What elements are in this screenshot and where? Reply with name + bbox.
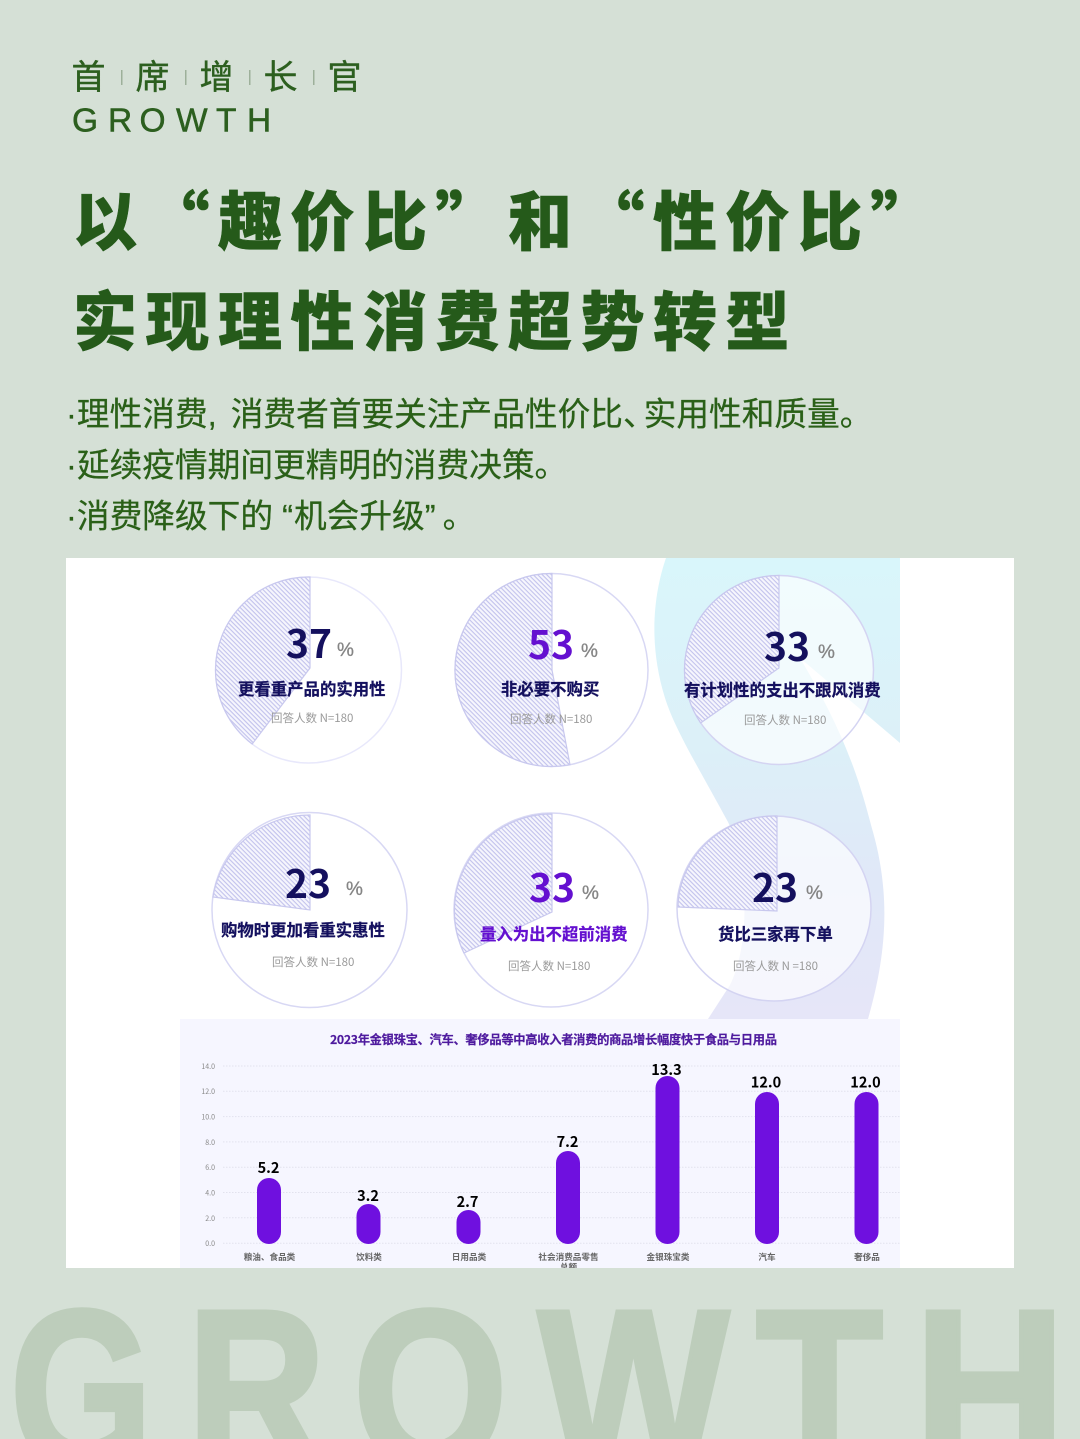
category labels: 社会消费品零售 [538, 1251, 599, 1263]
bar values: 12.0 [751, 1072, 781, 1092]
bars [257, 1076, 878, 1244]
pie: 33% planned spending: 33 [764, 617, 810, 673]
pie: 53%: 回答人数 N=180 [510, 711, 592, 727]
y axis labels: 4.0 [205, 1188, 215, 1198]
bar values: 13.3 [651, 1059, 682, 1080]
white content panel [66, 558, 1014, 1268]
bar values: 5.2 [258, 1157, 279, 1178]
bar chart panel [180, 1019, 900, 1273]
title: 实现理性消费超势转型 [73, 272, 798, 364]
category labels: 金银珠宝类 [647, 1251, 690, 1263]
bullet points [66, 396, 872, 534]
bar values: 12.0 [850, 1072, 881, 1092]
category labels: 日用品类 [452, 1251, 487, 1263]
pie: 53%: % [581, 641, 598, 662]
category labels [244, 1252, 880, 1268]
brand header [72, 50, 392, 140]
bullet points: ·理性消费, 消费者首要关注产品性价比、实用性和质量。 [66, 396, 872, 432]
pie: 23% compare prices: 货比三家再下单 [718, 921, 833, 945]
pie: 33% planned spending: % [818, 642, 835, 663]
category labels: 粮油、食品类 [244, 1251, 296, 1263]
pie: 33% planned spending: 回答人数 N=180 [744, 712, 826, 728]
pie: 37% [216, 577, 402, 763]
pie: 37%: % [337, 640, 354, 661]
bar values: 3.2 [357, 1185, 379, 1206]
pie: 37%: 回答人数 N=180 [271, 710, 353, 726]
category labels: 总额 [560, 1261, 577, 1273]
bar values: 2.7 [457, 1191, 478, 1212]
pie: 23% compare prices [677, 816, 871, 1001]
y axis labels: 14.0 [201, 1062, 215, 1072]
pie: 23% value for money: 回答人数 N=180 [272, 954, 354, 970]
category labels: 奢侈品 [854, 1251, 880, 1263]
y axis labels: 0.0 [205, 1239, 215, 1249]
pie: 33% live within means: % [582, 883, 599, 904]
bar values [258, 1059, 881, 1212]
title: 以“趣价比”和“性价比” [73, 172, 943, 264]
y axis labels: 8.0 [205, 1138, 215, 1148]
title [73, 172, 943, 364]
y axis labels: 2.0 [205, 1214, 215, 1224]
brand name: 首席增长官 [72, 50, 392, 99]
background watermark: GROWTH [16, 1307, 1054, 1439]
pie: 37%: 更看重产品的实用性 [238, 676, 386, 700]
decorative gradient band [654, 558, 900, 1019]
pie: 23% value for money: % [346, 879, 363, 900]
chart title: 2023年金银珠宝、汽车、奢侈品等中高收入者消费的商品增长幅度快于食品与日用品 [330, 1030, 777, 1048]
y axis labels: 10.0 [201, 1112, 215, 1122]
pie: 23% compare prices: 23 [752, 858, 798, 914]
brand separators [121, 70, 314, 85]
y axis labels: 6.0 [205, 1163, 215, 1173]
pie: 37%: 37 [286, 614, 332, 670]
pie: 33% planned spending [684, 576, 881, 764]
y axis labels [201, 1062, 215, 1249]
pie: 33% live within means: 33 [529, 858, 575, 914]
pie: 33% planned spending: 有计划性的支出不跟风消费 [684, 677, 881, 701]
pie: 33% live within means: 量入为出不超前消费 [480, 921, 628, 945]
pie: 53% [455, 573, 648, 766]
pie: 23% value for money: 23 [285, 854, 331, 910]
category labels: 饮料类 [356, 1251, 382, 1263]
brand subtitle: GROWTH [72, 102, 271, 140]
pie: 23% compare prices: % [806, 883, 823, 904]
bullet points: ·消费降级下的 “机会升级”。 [66, 498, 475, 534]
bullet points: ·延续疫情期间更精明的消费决策。 [66, 446, 567, 484]
bar values: 7.2 [557, 1131, 578, 1152]
pie: 53%: 非必要不购买 [501, 676, 599, 700]
pie: 23% compare prices: 回答人数 N =180 [733, 958, 818, 974]
pie: 23% value for money [212, 812, 407, 1008]
pie: 53%: 53 [528, 615, 574, 671]
y axis labels: 12.0 [201, 1087, 215, 1097]
pie: 23% value for money: 购物时更加看重实惠性 [221, 917, 385, 941]
pie: 33% live within means: 回答人数 N=180 [508, 958, 590, 974]
category labels: 汽车 [758, 1251, 776, 1263]
pie: 33% live within means [454, 813, 648, 1007]
